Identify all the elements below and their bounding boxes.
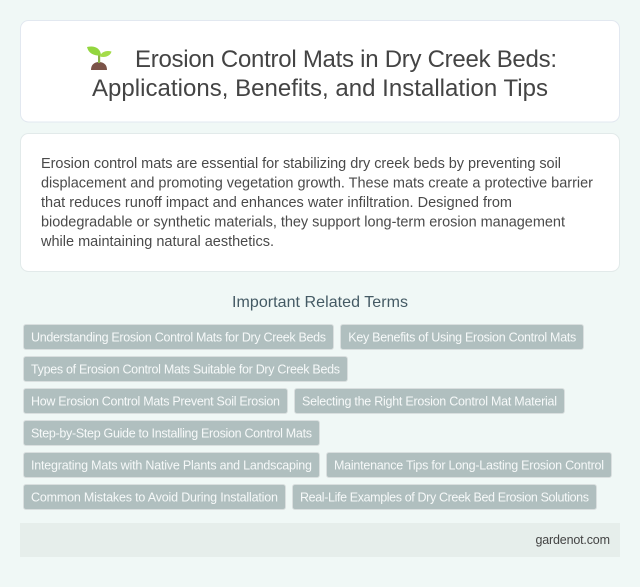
tag: Real-Life Examples of Dry Creek Bed Erosion Solutions [300,490,589,504]
tag: Selecting the Right Erosion Control Mat Material [302,394,557,408]
tag [24,324,334,350]
tag [326,452,612,478]
tag [24,484,286,510]
text block: introduction paragraph: displacement and promoting vegetation growth. These mats create a protective barrier [41,176,593,192]
footer [20,523,620,557]
tag: Step-by-Step Guide to Installing Erosion Control Mats [31,426,312,440]
text block: introduction paragraph: biodegradable or synthetic materials, they support long-term erosion management [41,214,565,230]
title: Erosion Control Mats in Dry Creek Beds: [135,46,557,73]
text block: introduction paragraph [40,156,593,250]
tag [24,420,320,446]
tag: Types of Erosion Control Mats Suitable for Dry Creek Beds [31,362,340,376]
icon: sprout [87,46,112,70]
tag: Understanding Erosion Control Mats for Dry Creek Beds [31,330,326,344]
title [92,46,557,102]
text block: introduction paragraph: while maintaining natural aesthetics. [40,234,274,250]
tag [24,356,348,382]
tag [292,484,596,510]
tag: Integrating Mats with Native Plants and Landscaping [31,458,312,472]
text block: introduction paragraph: that reduces runoff impact and enhances water infiltration. Designed from [41,195,512,211]
panel: related term tags [24,324,612,510]
tag [340,324,584,350]
tag: Key Benefits of Using Erosion Control Mats [348,330,576,344]
tag: Common Mistakes to Avoid During Installation [31,490,278,504]
footer: gardenot.com [536,533,610,547]
tag [24,452,320,478]
tag [294,388,564,414]
title: Applications, Benefits, and Installation Tips [92,75,548,102]
tag: How Erosion Control Mats Prevent Soil Erosion [31,394,280,408]
heading: important related terms: Important Related Terms [232,294,408,311]
panel: title card [20,20,620,122]
panel: introduction [20,134,620,272]
text block: introduction paragraph: Erosion control mats are essential for stabilizing dry creek beds by preventing soil [41,156,561,172]
tag: Maintenance Tips for Long-Lasting Erosion Control [334,458,604,472]
tag [24,388,288,414]
